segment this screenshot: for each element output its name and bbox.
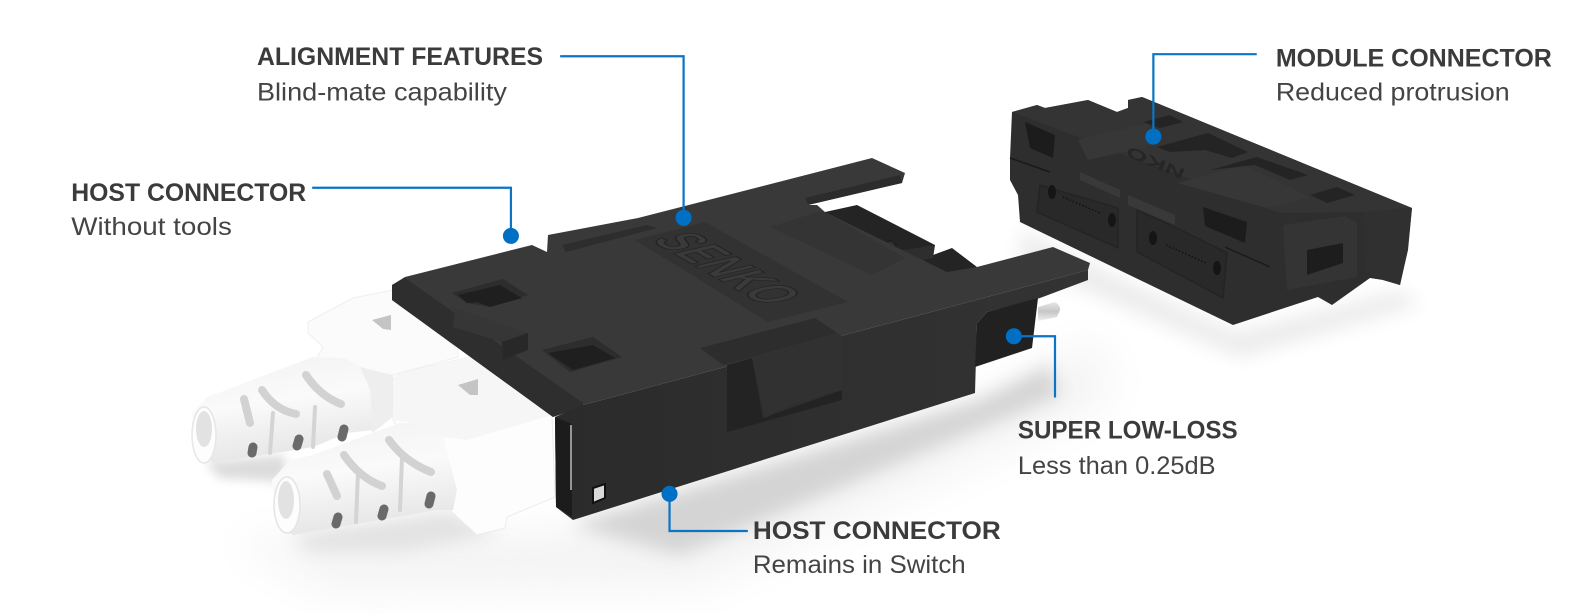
callout: super low-loss: SUPER LOW-LOSS (1018, 417, 1238, 445)
rear top slot plate (770, 212, 905, 275)
callout: module connector: MODULE CONNECTOR (1276, 44, 1552, 72)
panel: module connector (1010, 97, 1412, 325)
module guide holes (1048, 185, 1221, 275)
callout: host connector without tools (71, 179, 519, 244)
module side clip (1283, 216, 1357, 290)
callout: super low-loss (1006, 328, 1238, 480)
callout: host connector without tools: Without tools (71, 213, 232, 241)
callout: alignment features: Blind-mate capability (257, 78, 507, 106)
soft floor shadows (205, 230, 1420, 590)
module body (1010, 97, 1412, 325)
callout: super low-loss: Less than 0.25dB (1018, 452, 1216, 480)
lower window (542, 337, 622, 372)
side latch recess (727, 358, 842, 432)
module latch strips (1080, 172, 1175, 225)
back white connector with strain-relief boot (192, 290, 458, 463)
left chamfer band (392, 278, 583, 417)
module raised pads (1078, 123, 1310, 208)
callout: alignment features: ALIGNMENT FEATURES (257, 43, 543, 71)
module logo: NKO (1123, 142, 1188, 182)
callout: host connector remains in switch: Remains in Switch (753, 551, 966, 579)
rear optical block (975, 298, 1038, 367)
rear tab underside (805, 175, 902, 205)
module top face (1012, 97, 1412, 213)
callout: host connector without tools: HOST CONNECTOR (71, 179, 306, 207)
logo: SENKO (636, 228, 818, 309)
upper top slot (562, 225, 657, 252)
module left side port (1025, 122, 1055, 158)
callout: alignment features (257, 43, 692, 226)
guide pin (1038, 302, 1060, 321)
side latch (752, 333, 842, 418)
callout: module connector (1145, 44, 1552, 145)
module left ferrule face (1037, 185, 1118, 248)
small front window (593, 484, 605, 503)
callout: host connector remains in switch (662, 486, 1001, 579)
upper window (452, 279, 528, 307)
side face (555, 270, 1088, 520)
front edge highlight (570, 425, 572, 490)
front dark strip (555, 417, 572, 517)
callout: module connector: Reduced protrusion (1276, 78, 1510, 106)
callout: host connector remains in switch: HOST CONNECTOR (753, 517, 1001, 545)
panel: host connector housing (392, 158, 1090, 520)
module right side port (1203, 207, 1247, 243)
left guide rail (453, 308, 528, 360)
front white connector with strain-relief boot (272, 357, 555, 535)
module right ferrule face (1137, 210, 1227, 298)
ridge line (700, 318, 837, 365)
module recess windows (1143, 115, 1355, 203)
module fiber rows (1063, 197, 1206, 263)
module split line (1010, 158, 1270, 267)
logo plate (635, 222, 848, 322)
rear latch mechanism (825, 205, 977, 278)
top face (392, 158, 1090, 417)
